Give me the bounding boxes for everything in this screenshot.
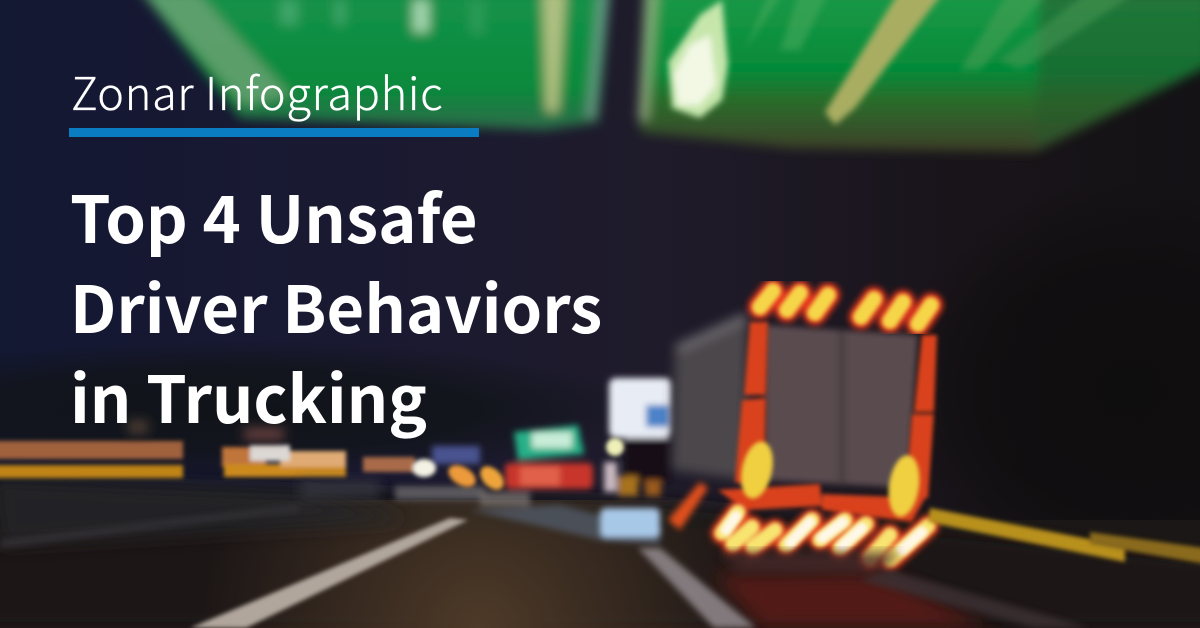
distant light streaks on the left (0, 420, 415, 498)
blue rule under eyebrow (69, 128, 479, 137)
main truck trailer (668, 291, 990, 628)
trailer side panel (672, 313, 748, 480)
headline: in Trucking (70, 348, 427, 442)
road surface (0, 478, 1200, 628)
headline (70, 168, 602, 442)
distant truck with blue and white box (600, 378, 672, 538)
orange reflective tape (718, 322, 937, 522)
overhead sign right (638, 0, 1200, 152)
overhead sign left (140, 0, 610, 130)
headline: Top 4 Unsafe (70, 168, 478, 262)
dark horizon treeline and right-hand darkness (0, 180, 1200, 600)
road markings (0, 505, 1200, 628)
eyebrow label: Zonar Infographic (71, 58, 443, 123)
upper clearance lights (760, 291, 931, 324)
truck undercarriage glow (668, 482, 990, 628)
distant traffic lights and signs (395, 425, 660, 545)
yellow side reflectors (736, 439, 923, 519)
lower tail lights (722, 512, 928, 560)
headline: Driver Behaviors (70, 258, 602, 352)
trailer rear panel (765, 325, 918, 488)
